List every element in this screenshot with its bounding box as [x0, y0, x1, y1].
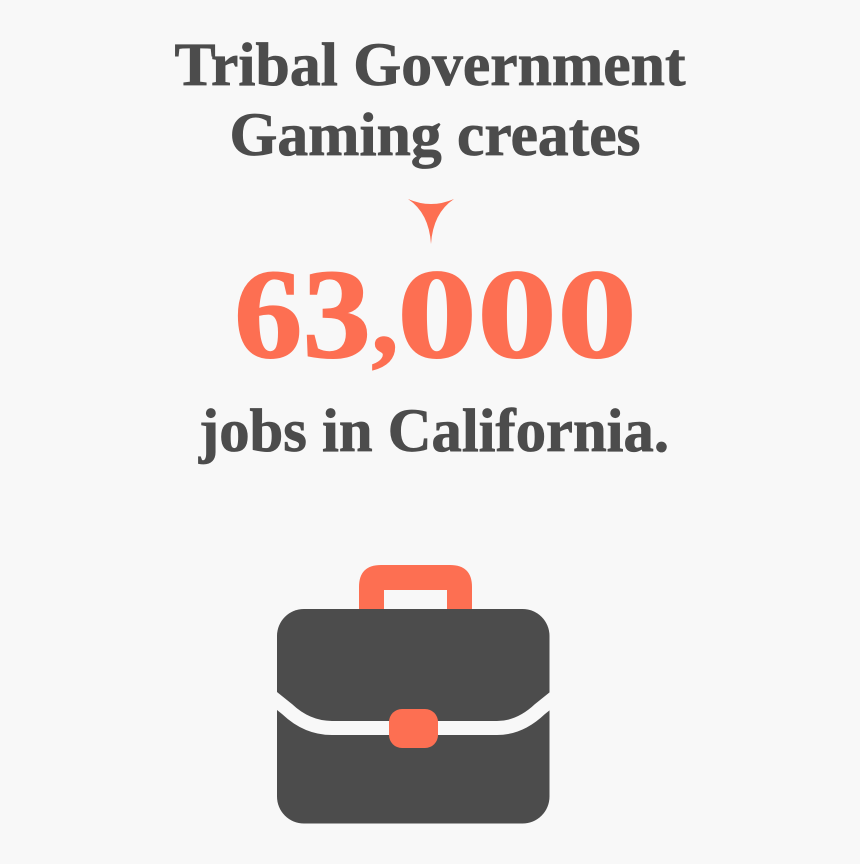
subheading: jobs in California. — [198, 398, 669, 465]
briefcase handle — [359, 565, 472, 615]
briefcase clasp — [389, 709, 438, 748]
heading line 2: Gaming creates — [230, 102, 640, 169]
big number: , — [372, 258, 398, 377]
briefcase strap — [267, 693, 560, 728]
briefcase body — [277, 609, 550, 824]
icon: arrow down — [408, 199, 454, 244]
big number — [234, 243, 637, 385]
heading line 1: Tribal Government — [174, 32, 686, 99]
icon: briefcase — [267, 565, 560, 824]
big number: 000 — [397, 243, 637, 385]
big number: 63 — [234, 243, 371, 385]
